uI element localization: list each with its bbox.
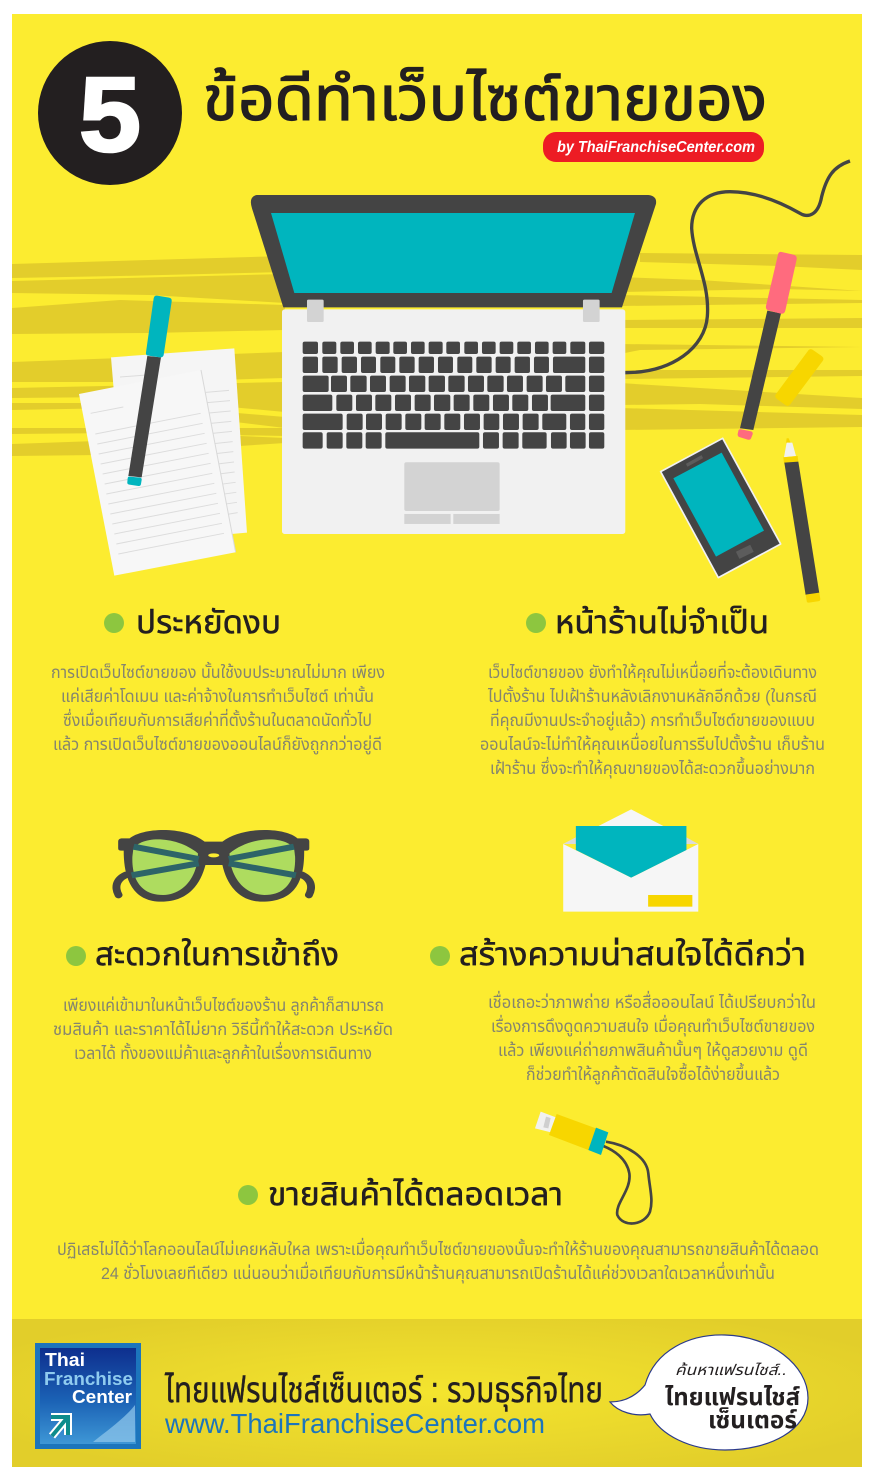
- body text: แล้ว การเปิดเว็บไซต์ขายของออนไลน์ก็ยังถูกกว่าอยู่ดี: [53, 734, 382, 756]
- body text: ที่คุณมีงานประจำอยู่แล้ว) การทำเว็บไซต์ขายของแบบ: [490, 708, 815, 732]
- heading: ขายสินค้าได้ตลอดเวลา: [268, 1176, 563, 1212]
- section 5: sell anytime: [57, 1176, 819, 1284]
- body text: [51, 661, 385, 756]
- icon: envelope: [563, 809, 698, 912]
- heading: หน้าร้านไม่จำเป็น: [555, 604, 769, 640]
- body text: [488, 990, 816, 1086]
- icon: papers and teal pen: [79, 296, 247, 576]
- body text: ก็ช่วยทำให้ลูกค้าตัดสินใจซื้อได้ง่ายขึ้นแล้ว: [526, 1062, 780, 1086]
- bullet: [238, 1185, 258, 1205]
- phone: [661, 438, 781, 578]
- body text: แค่เสียค่าโดเมน และค่าจ้างในการทำเว็บไซต์ เท่านั้น: [61, 685, 374, 706]
- footer headline: ไทยแฟรนไชส์เซ็นเตอร์ : รวมธุรกิจไทย: [164, 1369, 603, 1411]
- footer band: [12, 1319, 862, 1467]
- body text: เวลาได้ ทั้งของแม่ค้าและลูกค้าในเรื่องการเดินทาง: [74, 1041, 372, 1065]
- icon: usb drive: [535, 1112, 651, 1223]
- speech bubble: ค้นหาแฟรนไชส์..: [675, 1362, 787, 1379]
- logo: [35, 1343, 141, 1449]
- icon: laptop: [251, 195, 656, 534]
- speech bubble: ไทยแฟรนไชส์: [665, 1384, 800, 1411]
- byline pill: by ThaiFranchiseCenter.com: [557, 139, 755, 156]
- section 2: no storefront needed: [480, 604, 825, 779]
- title badge: number 5: 5: [79, 56, 141, 174]
- body text: ซึ่งเมื่อเทียบกับการเสียค่าที่ตั้งร้านในตลาดนัดทั่วไป: [63, 708, 372, 730]
- body text: การเปิดเว็บไซต์ขายของ นั้นใช้งบประมาณไม่มาก เพียง: [51, 661, 385, 682]
- bullet: [526, 613, 546, 633]
- pencil: [783, 438, 820, 603]
- heading: สะดวกในการเข้าถึง: [95, 936, 339, 972]
- heading: สร้างความน่าสนใจได้ดีกว่า: [459, 936, 806, 972]
- title badge: number 5: [38, 41, 182, 185]
- pink pen: [738, 252, 797, 440]
- bullet: [430, 946, 450, 966]
- body text: เชื่อเถอะว่าภาพถ่าย หรือสื่อออนไลน์ ได้เปรียบกว่าใน: [488, 990, 816, 1012]
- section 3: convenient access: [53, 936, 393, 1065]
- body text: ชมสินค้า และราคาได้ไม่ยาก วิธีนี้ทำให้สะดวก ประหยัด: [53, 1017, 393, 1039]
- speech bubble: เซ็นเตอร์: [708, 1407, 797, 1434]
- logo: Thai: [45, 1350, 85, 1370]
- body text: เว็บไซต์ขายของ ยังทำให้คุณไม่เหนื่อยที่จะต้องเดินทาง: [488, 660, 817, 683]
- icon: pink pen, eraser, phone and pencil: [661, 252, 823, 603]
- body text: [480, 660, 825, 779]
- body text: 24 ชั่วโมงเลยทีเดียว แน่นอนว่าเมื่อเทียบกับการมีหน้าร้านคุณสามารถเปิดร้านได้แค่ช่วงเวลาใดเวลาหนึ่งเท่านั้น: [101, 1261, 775, 1284]
- logo: Center: [72, 1387, 132, 1407]
- body text: เรื่องการดึงดูดความสนใจ เมื่อคุณทำเว็บไซต์ขายของ: [491, 1014, 815, 1038]
- body text: ปฏิเสธไม่ได้ว่าโลกออนไลน์ไม่เคยหลับใหล เพราะเมื่อคุณทำเว็บไซต์ขายของนั้นจะทำให้ร้านของคุณสามารถขายสินค้าได้ตลอด: [57, 1237, 819, 1260]
- body text: ไปตั้งร้าน ไปเฝ้าร้านหลังเลิกงานหลักอีกด้วย (ในกรณี: [487, 685, 817, 706]
- body text: เพียงแค่เข้ามาในหน้าเว็บไซต์ของร้าน ลูกค้าก็สามารถ: [63, 995, 384, 1017]
- heading: ประหยัดงบ: [136, 604, 281, 640]
- body text: เฝ้าร้าน ซึ่งจะทำให้คุณขายของได้สะดวกขึ้นอย่างมาก: [490, 756, 815, 779]
- bullet: [104, 613, 124, 633]
- title: ข้อดีทำเว็บไซต์ขายของ: [203, 65, 767, 134]
- icon: cable: [623, 161, 850, 373]
- body text: [53, 995, 393, 1065]
- section 1: save budget: [51, 604, 385, 756]
- section 4: more attractive: [430, 936, 816, 1086]
- eraser: [775, 349, 823, 406]
- footer url: www.ThaiFranchiseCenter.com: [164, 1408, 545, 1439]
- logo: Franchise: [44, 1369, 133, 1389]
- body text: แล้ว เพียงแค่ถ่ายภาพสินค้านั้นๆ ให้ดูสวยงาม ดูดี: [498, 1039, 808, 1062]
- bullet: [66, 946, 86, 966]
- icon: sunglasses: [116, 830, 311, 902]
- speech bubble: [610, 1335, 808, 1450]
- desk streaks background: [12, 253, 862, 456]
- byline pill: [543, 132, 764, 162]
- body text: ออนไลน์จะไม่ทำให้คุณเหนื่อยในการรีบไปตั้งร้าน เก็บร้าน: [480, 732, 825, 755]
- body text: [57, 1237, 819, 1284]
